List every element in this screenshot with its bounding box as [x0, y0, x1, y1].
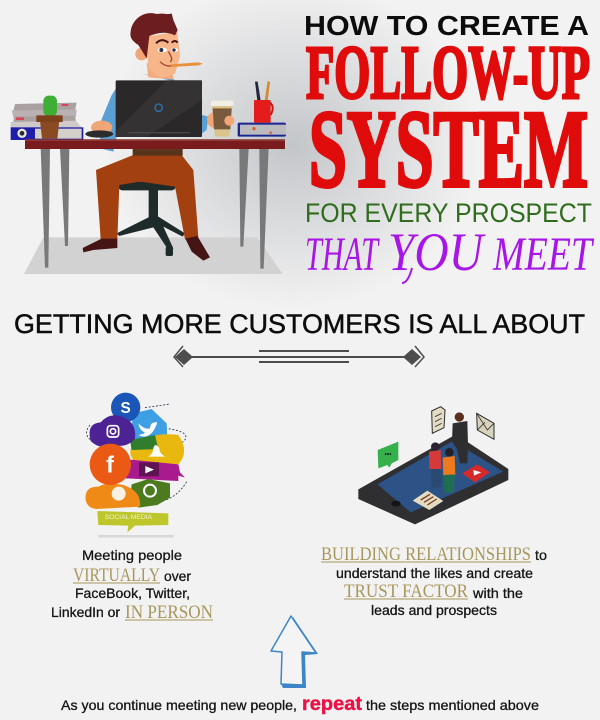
instagram glyph: [107, 426, 119, 437]
laptop: [116, 80, 202, 137]
pants: [96, 155, 198, 239]
illustration: man at desk: [11, 13, 286, 274]
cactus in pot: [36, 96, 63, 139]
play button: [139, 462, 159, 476]
home button: [391, 501, 401, 507]
footer note: the steps mentioned above: [366, 697, 539, 713]
chat bubble: •••: [384, 451, 392, 458]
text block: meeting people: FaceBook, Twitter,: [75, 585, 190, 601]
divider ornament: [174, 346, 424, 367]
red tile: [462, 464, 490, 482]
man: [83, 13, 210, 261]
facebook circle: [90, 444, 131, 485]
neck: [147, 63, 173, 79]
snapchat bubble: [130, 434, 184, 464]
desk legs: [41, 148, 269, 269]
shirt: [100, 74, 208, 152]
facebook glyph: f: [106, 451, 114, 477]
section heading: GETTING MORE CUSTOMERS IS ALL ABOUT: [14, 309, 585, 339]
text block: building relationships: to: [535, 547, 547, 563]
highlight: repeat: repeat: [302, 694, 363, 715]
text block: meeting people: over: [164, 568, 191, 584]
footer note: [61, 694, 539, 715]
icon: social media cluster: [85, 393, 187, 532]
text block: building relationships: with the: [472, 585, 523, 601]
text block: meeting people: [51, 547, 213, 623]
title line: that you meet: YOU: [388, 222, 486, 282]
person in black: [452, 412, 468, 463]
highlight: trust factor: TRUST FACTOR: [344, 581, 468, 602]
instagram cloud: [90, 415, 135, 447]
nose and mouth: [160, 52, 176, 66]
twitter bubble: [130, 409, 167, 446]
highlight: in person: IN PERSON: [125, 602, 213, 623]
chair: [117, 182, 185, 256]
title line: how to create a: HOW TO CREATE A: [304, 10, 589, 41]
hair: [130, 13, 178, 58]
icon: phone with people: [358, 407, 508, 524]
green bubble: [130, 435, 158, 450]
title line: that you meet: THAT: [305, 228, 380, 281]
floor: [24, 237, 283, 274]
text block: building relationships: leads and prospects: [371, 602, 497, 618]
youtube banner: [125, 459, 185, 481]
text block: building relationships: [321, 544, 547, 618]
text block: building relationships: understand the likes and create: [336, 565, 533, 581]
messenger glyph: [112, 487, 126, 501]
pencil: [171, 62, 203, 67]
person in red: [429, 442, 442, 488]
messenger cloud: [85, 484, 140, 509]
snapchat ghost: [148, 445, 165, 457]
arrow: up: [271, 616, 318, 688]
highlight: building relationships: BUILDING RELATIONSHIPS: [321, 544, 531, 565]
twitter bird: [138, 422, 157, 437]
whatsapp glyph: [144, 485, 156, 497]
social media banner: SOCIAL MEDIA: [105, 514, 153, 521]
dotted connectors: [87, 404, 187, 505]
phone screen: [377, 441, 503, 512]
title: [304, 10, 595, 283]
book stack and binder: [11, 103, 83, 140]
text block: meeting people: Meeting people: [82, 547, 182, 563]
eyes: [156, 40, 178, 52]
footer note: As you continue meeting new people,: [61, 697, 297, 713]
ear: [135, 48, 148, 60]
face: [146, 32, 180, 78]
mouse hand: [85, 121, 113, 138]
skype circle: [111, 393, 140, 422]
whatsapp burst: [130, 479, 170, 508]
highlight: virtually: VIRTUALLY: [73, 565, 160, 586]
text block: meeting people: LinkedIn or: [51, 604, 120, 620]
document tile: [413, 491, 443, 510]
desk top: [25, 139, 285, 149]
books, pencil mug: [238, 81, 286, 137]
shoes: [83, 236, 210, 261]
phone body: [358, 434, 508, 524]
coffee cup and hand: [207, 101, 234, 137]
shadow under social cluster: [98, 535, 174, 538]
document card: [432, 407, 445, 433]
person in orange: [443, 448, 455, 493]
envelope card: [477, 413, 494, 439]
chat bubble: [378, 442, 398, 468]
belt: [133, 149, 183, 156]
skype glyph: S: [121, 400, 131, 417]
title line: that you meet: [305, 222, 595, 283]
